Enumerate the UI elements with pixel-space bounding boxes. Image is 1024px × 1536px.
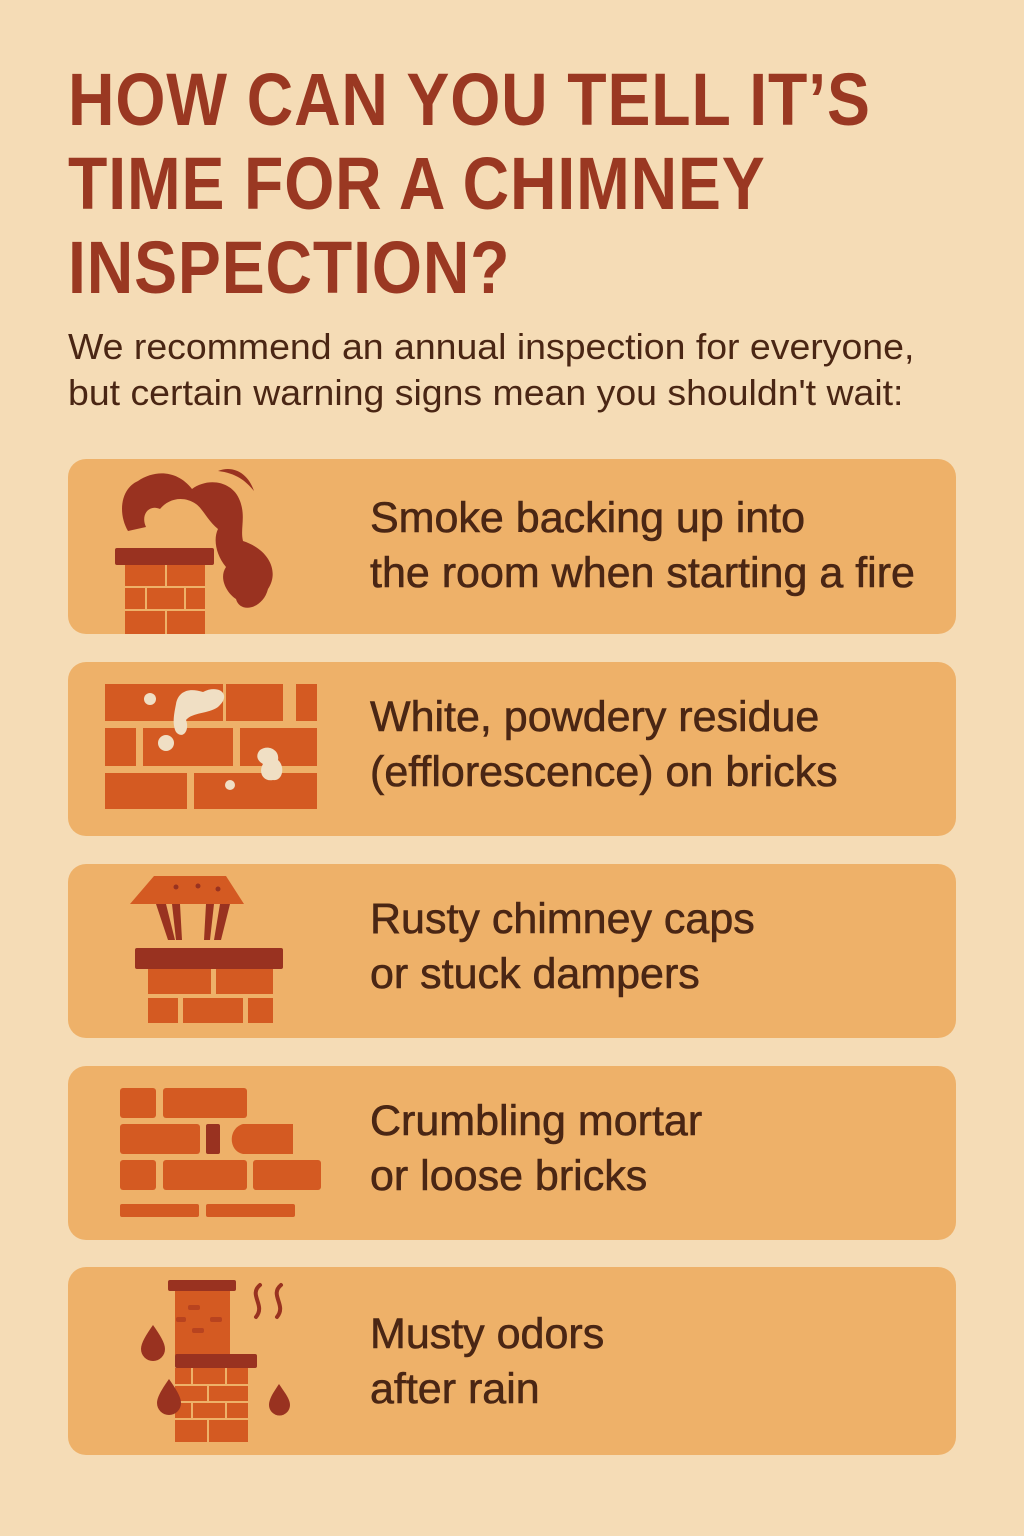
title: TIME FOR A CHIMNEY <box>68 142 766 225</box>
text: White, powdery residue <box>370 693 819 741</box>
text <box>370 1310 604 1413</box>
subtitle <box>68 326 914 413</box>
icon: bricks with residue <box>105 684 317 809</box>
title: INSPECTION? <box>68 226 510 309</box>
text: the room when starting a fire <box>370 549 915 597</box>
title: HOW CAN YOU TELL IT’S <box>68 58 871 141</box>
subtitle: We recommend an annual inspection for everyone, <box>68 326 914 367</box>
icon: chimney with smoke <box>115 469 273 634</box>
text: or stuck dampers <box>370 950 700 998</box>
icon: wet chimney <box>141 1280 290 1442</box>
text: Smoke backing up into <box>370 494 805 542</box>
text <box>370 494 915 597</box>
panel: caps <box>68 864 956 1038</box>
text <box>370 1097 702 1200</box>
text: (efflorescence) on bricks <box>370 748 838 796</box>
text: Crumbling mortar <box>370 1097 702 1145</box>
panel: smoke <box>68 459 956 634</box>
text: or loose bricks <box>370 1152 647 1200</box>
text: Musty odors <box>370 1310 604 1358</box>
title <box>68 58 871 309</box>
text <box>370 693 838 796</box>
text <box>370 895 755 998</box>
panel: mortar <box>68 1066 956 1240</box>
text: after rain <box>370 1365 540 1413</box>
panel: efflorescence <box>68 662 956 836</box>
subtitle: but certain warning signs mean you shouldn't wait: <box>68 372 903 413</box>
panel: musty <box>68 1267 956 1455</box>
icon: loose bricks <box>120 1088 321 1217</box>
text: Rusty chimney caps <box>370 895 755 943</box>
icon: chimney cap <box>130 876 283 1023</box>
